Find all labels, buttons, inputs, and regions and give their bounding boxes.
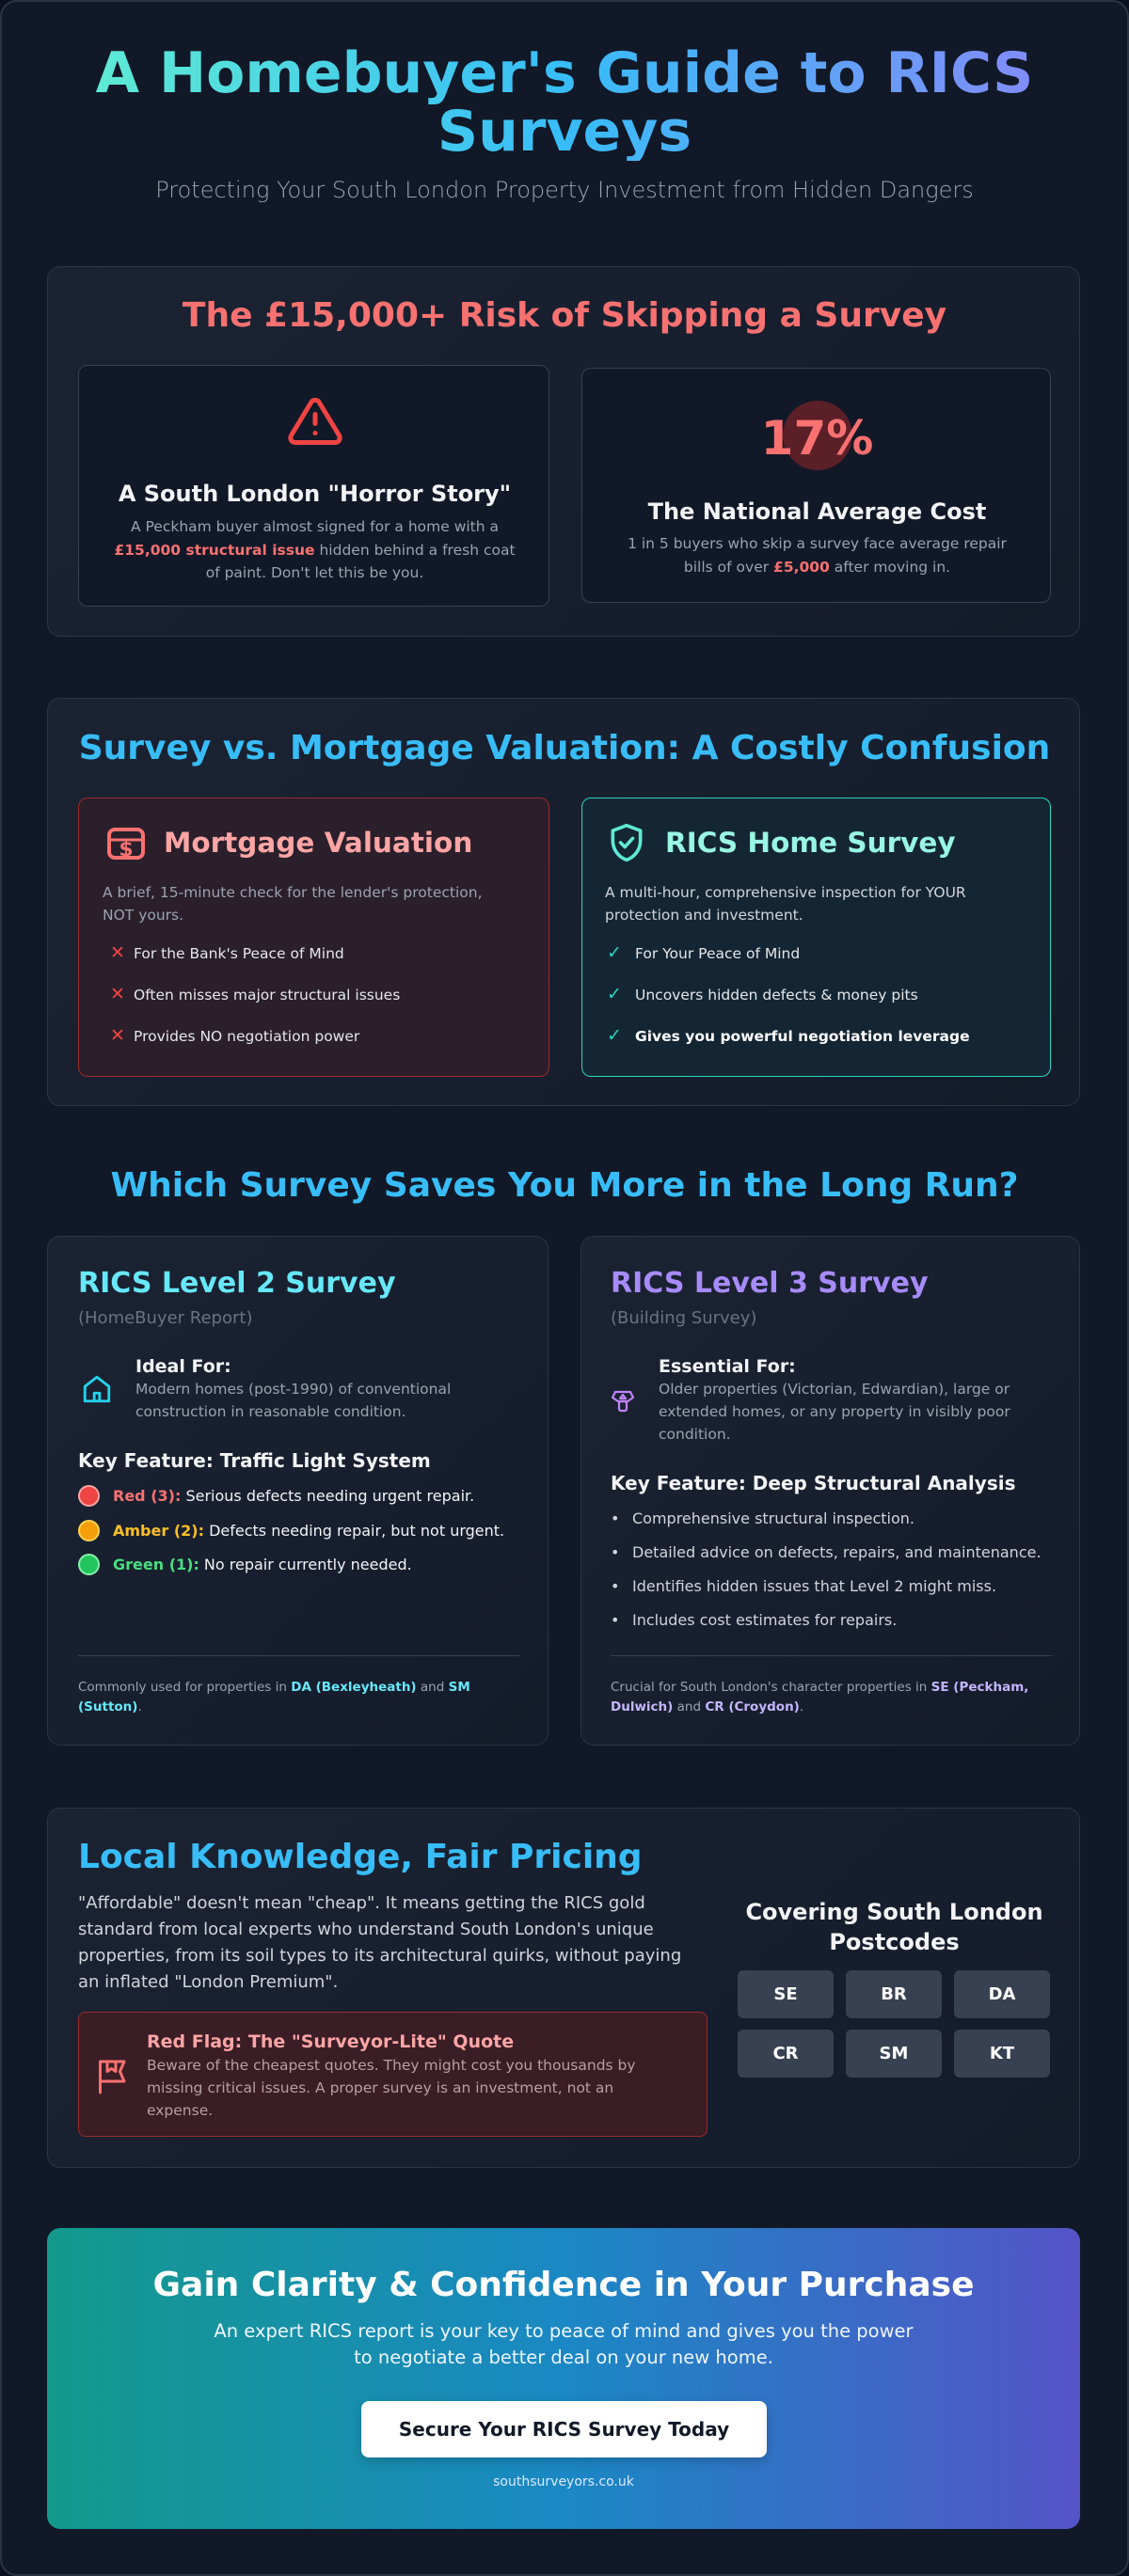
card text: A Peckham buyer almost signed for a home with a £15,000 structural issue hidden behind a fresh coat of paint. Don't let this be you. — [114, 518, 516, 581]
panel: level 3 — [580, 1236, 1080, 1746]
icon: flag — [99, 2060, 126, 2094]
panel: local knowledge — [47, 1808, 1080, 2168]
traffic light list: Red (3): Serious defects needing urgent repair. — [113, 1487, 474, 1505]
bullet list: Identifies hidden issues that Level 2 might miss. — [632, 1577, 996, 1595]
postcodes: Covering South London Postcodes — [745, 1899, 1043, 1955]
footer note: Crucial for South London's character properties in SE (Peckham, Dulwich) and CR (Croydon). — [611, 1680, 1028, 1715]
card title: RICS Home Survey — [665, 827, 956, 859]
bullet list: Detailed advice on defects, repairs, and maintenance. — [632, 1543, 1042, 1561]
list: pros: Gives you powerful negotiation leverage — [635, 1028, 970, 1045]
postcodes: KT — [990, 2044, 1014, 2063]
ideal for: Ideal For: — [135, 1356, 231, 1377]
cta text: An expert RICS report is your key to peace of mind and gives you the power to negotiate a better deal on your new home. — [214, 2320, 914, 2368]
card: mortgage valuation — [78, 798, 549, 1077]
panel: call to action — [47, 2228, 1080, 2529]
button — [361, 2401, 767, 2457]
postcodes: SM — [880, 2044, 908, 2063]
callout title: Red Flag: The "Surveyor-Lite" Quote — [147, 2031, 514, 2052]
bullet list — [611, 1509, 1042, 1629]
list: cons — [110, 942, 400, 1046]
postcodes: SE — [773, 1984, 798, 2004]
description: A brief, 15-minute check for the lender's protection, NOT yours. — [103, 884, 482, 924]
icon: warning — [288, 397, 342, 445]
title: RICS Level 2 Survey — [78, 1267, 396, 1300]
footer note: Commonly used for properties in DA (Bexleyheath) and SM (Sutton). — [78, 1680, 470, 1715]
list: pros: Uncovers hidden defects & money pits — [635, 987, 918, 1004]
subtitle: (HomeBuyer Report) — [78, 1308, 252, 1328]
title: Surveys — [437, 99, 692, 165]
title: A Homebuyer's Guide to RICS — [96, 40, 1033, 106]
list: pros — [607, 942, 970, 1046]
traffic light list — [78, 1485, 504, 1575]
bullet list: Includes cost estimates for repairs. — [632, 1611, 897, 1629]
traffic light list: Amber (2): Defects needing repair, but not urgent. — [113, 1522, 504, 1539]
heading: which survey: Which Survey Saves You More in the Long Run? — [110, 1166, 1019, 1205]
key feature heading: Key Feature: Deep Structural Analysis — [611, 1472, 1016, 1494]
bullet list: • — [611, 1577, 619, 1595]
list: pros: For Your Peace of Mind — [635, 945, 800, 962]
list: pros: ✓ — [607, 984, 622, 1004]
list: cons: ✕ — [110, 984, 125, 1004]
bullet list: Comprehensive structural inspection. — [632, 1509, 914, 1527]
subtitle: Protecting Your South London Property Investment from Hidden Dangers — [155, 177, 974, 203]
list: pros: ✓ — [607, 1025, 622, 1046]
cta heading: Gain Clarity & Confidence in Your Purchase — [152, 2266, 974, 2304]
heading: risk: The £15,000+ Risk of Skipping a Survey — [183, 296, 946, 335]
url: southsurveyors.co.uk — [493, 2474, 634, 2489]
list: cons: Often misses major structural issues — [134, 987, 400, 1004]
title — [96, 40, 1033, 165]
panel: risk of skipping — [47, 266, 1080, 637]
stat: 17% — [783, 401, 852, 470]
bullet list: • — [611, 1543, 619, 1561]
list: cons: For the Bank's Peace of Mind — [134, 945, 344, 962]
icon: shield check — [612, 824, 642, 861]
postcodes — [738, 1899, 1050, 2078]
ideal for — [135, 1356, 451, 1420]
icon: structure — [612, 1390, 634, 1413]
list: cons: Provides NO negotiation power — [134, 1028, 359, 1045]
icon: banknote — [107, 828, 145, 861]
list: cons: ✕ — [110, 942, 125, 963]
key feature heading: Key Feature: Traffic Light System — [78, 1449, 431, 1472]
callout: red flag — [78, 2012, 708, 2137]
postcodes: BR — [881, 1984, 907, 2004]
button: Secure Your RICS Survey Today — [399, 2418, 729, 2441]
traffic light list: Green (1): No repair currently needed. — [113, 1556, 412, 1573]
panel: survey vs valuation — [47, 698, 1080, 1106]
essential for: Older properties (Victorian, Edwardian), large or extended homes, or any property in visibly poor condition. — [659, 1381, 1010, 1443]
card heading: A South London "Horror Story" — [119, 481, 511, 507]
essential for: Essential For: — [659, 1356, 796, 1377]
card: rics home survey — [581, 798, 1051, 1077]
title: RICS Level 3 Survey — [611, 1267, 929, 1300]
callout text: Beware of the cheapest quotes. They might cost you thousands by missing critical issues. A proper survey is an investment, not an expense. — [147, 2057, 636, 2119]
panel: level 2 — [47, 1236, 549, 1746]
ideal for: Modern homes (post-1990) of conventional construction in reasonable condition. — [135, 1381, 451, 1420]
heading: Local Knowledge, Fair Pricing — [78, 1838, 643, 1876]
postcodes: DA — [989, 1984, 1015, 2004]
bullet list: • — [611, 1509, 619, 1527]
icon: house — [83, 1375, 111, 1403]
card title: Mortgage Valuation — [164, 827, 472, 859]
description: A multi-hour, comprehensive inspection for YOUR protection and investment. — [605, 884, 966, 924]
card: horror story — [78, 365, 549, 607]
postcodes: CR — [772, 2044, 799, 2063]
paragraph: "Affordable" doesn't mean "cheap". It means getting the RICS gold standard from local experts who understand South London's unique properties, from its soil types to its architectural quirks, without paying an inflated "London Premium". — [78, 1893, 681, 1992]
card text: 1 in 5 buyers who skip a survey face average repair bills of over £5,000 after moving in. — [628, 535, 1007, 576]
bullet list: • — [611, 1611, 619, 1629]
heading: Survey vs. Mortgage Valuation: A Costly Confusion — [79, 729, 1050, 767]
subtitle: (Building Survey) — [611, 1308, 756, 1328]
list: pros: ✓ — [607, 942, 622, 963]
card: national average — [581, 368, 1051, 603]
card: national average: 17% — [761, 411, 873, 466]
card heading: The National Average Cost — [648, 498, 986, 525]
list: cons: ✕ — [110, 1025, 125, 1046]
